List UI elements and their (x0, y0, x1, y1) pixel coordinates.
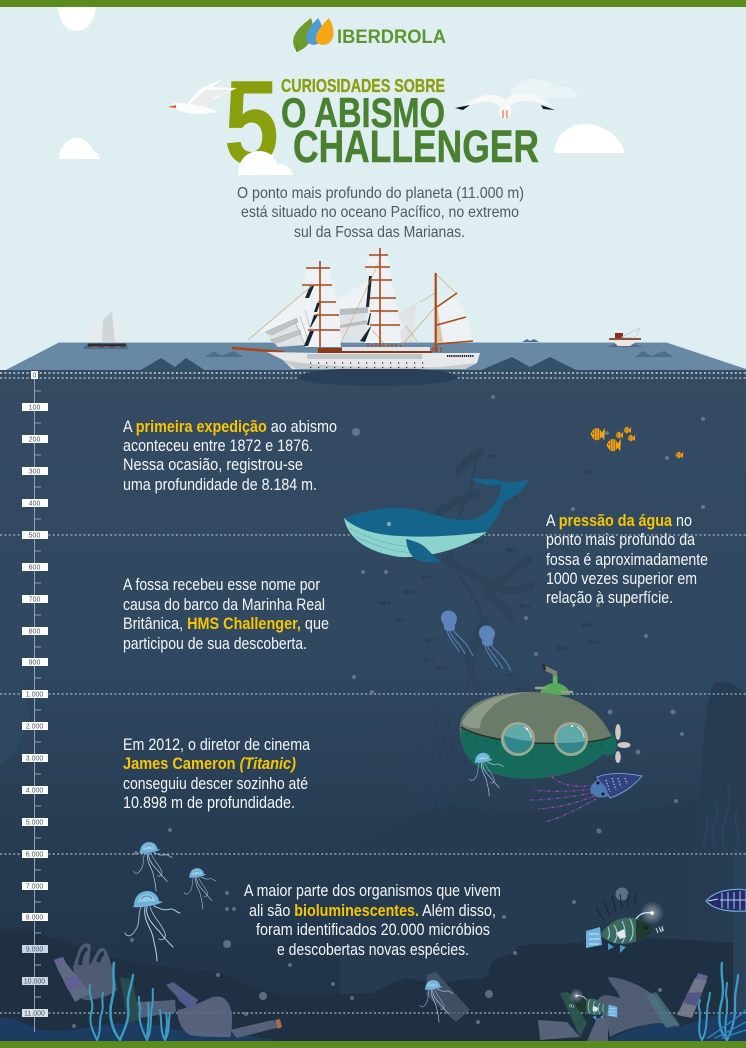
jellyfish by submarine (469, 753, 503, 796)
submarine (460, 664, 630, 779)
ruler: 9.000 (26, 946, 43, 954)
text block: James Cameron: conseguiu descer sozinho até (123, 775, 308, 793)
ruler: 100 (29, 404, 40, 412)
ship shadow (298, 368, 458, 386)
plastic waste left (54, 943, 282, 1038)
ruler: 7.000 (26, 884, 43, 890)
text block: bioluminescence: e descobertas novas espécies. (277, 941, 469, 959)
text block: name origin: participou de sua descoberta. (123, 635, 307, 653)
striped fish right (706, 889, 746, 911)
seaweed left (90, 963, 170, 1040)
bottom green bar (0, 1041, 746, 1048)
text block: water pressure: relação à superfície. (546, 589, 673, 607)
ruler: 10.000 (24, 978, 45, 986)
text block: James Cameron: Em 2012, o diretor de cinema (123, 736, 311, 754)
text block: bioluminescence: foram identificados 20.000 micróbios (256, 921, 490, 939)
small boat right (606, 328, 642, 347)
text block: first expedition: A primeira expedição ao abismo (123, 418, 337, 436)
text block: bioluminescence (244, 882, 501, 959)
text block: bioluminescence: A maior parte dos organismos que vivem (244, 882, 501, 900)
text block: water pressure: A pressão da água no (546, 512, 692, 530)
text block: water pressure (546, 512, 708, 607)
ruler: 5.000 (26, 820, 43, 826)
cloud over numeral (238, 151, 293, 175)
text block: first expedition (123, 418, 337, 494)
squid (528, 773, 642, 822)
background silhouettes: kelp, corals and seabed (0, 450, 746, 1041)
ruler: 1.000 (26, 692, 43, 698)
text block: name origin: A fossa recebeu esse nome por (123, 576, 320, 594)
whale (344, 478, 529, 562)
deep ocean (0, 370, 746, 1041)
jellyfish group left (125, 842, 216, 961)
text block: first expedition: uma profundidade de 8.184 m. (123, 476, 317, 494)
title: 5 curiosidades sobre o Abismo Challenger (224, 56, 539, 190)
jellyfish on bottle (420, 980, 453, 1022)
ruler: 4.000 (26, 788, 43, 794)
ruler: 0 (33, 372, 37, 380)
ruler (22, 371, 48, 1032)
seagull right (455, 94, 555, 118)
text block: first expedition: aconteceu entre 1872 e 1876. (123, 437, 313, 455)
intro text (237, 185, 524, 241)
text block: bioluminescence: ali são bioluminescentes. Além disso, (249, 902, 496, 920)
anglerfish (569, 894, 664, 1021)
logo: Iberdrola: IBERDROLA (337, 27, 446, 48)
ruler: 6.000 (26, 852, 43, 858)
orange fish school (591, 426, 683, 458)
intro text: O ponto mais profundo do planeta (11.000 m) (237, 185, 524, 202)
title: 5 curiosidades sobre o Abismo Challenger: CHALLENGER (293, 121, 539, 172)
ruler: 2.000 (26, 724, 43, 730)
clouds (58, 7, 625, 159)
ruler: 900 (29, 660, 40, 666)
ruler: 3.000 (26, 756, 43, 762)
ruler: 600 (29, 564, 40, 572)
text block: name origin: causa do barco da Marinha Real (123, 596, 325, 614)
bubbles (72, 395, 705, 1028)
small sailboat left (83, 311, 129, 349)
ruler: 11.000 (24, 1010, 45, 1018)
ruler: 8.000 (26, 914, 43, 922)
text block: first expedition: Nessa ocasião, registrou-se (123, 456, 303, 474)
intro text: sul da Fossa das Marianas. (294, 224, 465, 241)
depth dotted lines (0, 373, 746, 1013)
title: 5 curiosidades sobre o Abismo Challenger: O ABISMO (281, 89, 445, 136)
ruler: 800 (29, 628, 40, 636)
text block: name origin: Britânica, HMS Challenger, que (123, 615, 329, 633)
text block: water pressure: ponto mais profundo da (546, 531, 696, 549)
top green bar (0, 0, 746, 7)
sailing ship (232, 248, 480, 369)
intro text: está situado no oceano Pacífico, no extremo (241, 204, 519, 221)
seaweed right (699, 963, 746, 1040)
text block: James Cameron: James Cameron (Titanic) (123, 755, 296, 773)
ruler: 500 (29, 532, 40, 540)
text block: James Cameron: 10.898 m de profundidade. (123, 794, 295, 812)
logo: Iberdrola (293, 18, 446, 52)
ruler: 200 (29, 436, 40, 444)
text block: James Cameron (123, 736, 311, 812)
sea surface (0, 339, 746, 376)
title: 5 curiosidades sobre o Abismo Challenger: 5 (224, 56, 279, 190)
ruler: 400 (29, 500, 40, 508)
text block: water pressure: fossa é aproximadamente (546, 551, 708, 569)
plastic waste right (538, 973, 708, 1041)
blue jellyfish pair (441, 610, 511, 671)
plastic bottle by jellyfish (426, 972, 470, 1022)
text block: water pressure: 1000 vezes superior em (546, 570, 697, 588)
text block: name origin (123, 576, 329, 653)
seagull left (168, 79, 237, 114)
ruler: 300 (29, 468, 40, 476)
title: 5 curiosidades sobre o Abismo Challenger: CURIOSIDADES SOBRE (281, 76, 445, 96)
ruler: 700 (29, 596, 40, 604)
